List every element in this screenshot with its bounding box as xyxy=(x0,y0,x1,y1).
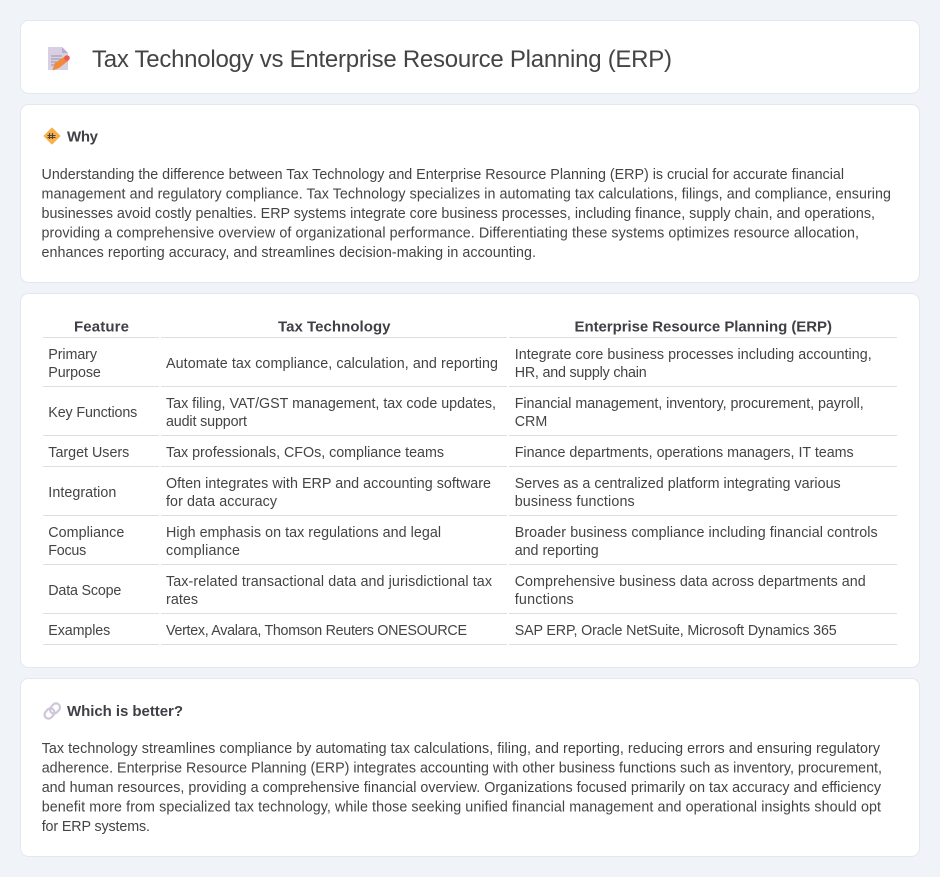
row: compliance focus: compliance xyxy=(166,543,240,559)
row: key functions xyxy=(48,396,864,430)
row: data scope: Comprehensive business data across departments and xyxy=(515,574,866,590)
row: target users: Tax professionals, CFOs, compliance teams xyxy=(166,445,444,461)
table header row: Feature xyxy=(74,318,129,336)
row: compliance focus: High emphasis on tax regulations and legal xyxy=(166,525,441,541)
text block: which paragraph xyxy=(42,741,882,835)
row: target users: Finance departments, operations managers, IT teams xyxy=(515,445,854,461)
text block: which paragraph: adherence. Enterprise Resource Planning (ERP) integrates accounting with other business functions such as inventory, procurement, xyxy=(42,760,882,776)
row: examples: Examples xyxy=(48,623,110,639)
row: primary purpose: HR, and supply chain xyxy=(515,365,647,381)
row: primary purpose: Primary xyxy=(48,347,98,363)
row: data scope xyxy=(48,574,866,608)
text block: why paragraph: enhances reporting accuracy, and streamlines decision-making in accounting. xyxy=(42,245,536,261)
heading: which is better: Which is better? xyxy=(67,703,183,720)
row: data scope: Data Scope xyxy=(48,583,121,599)
row: integration: Integration xyxy=(48,485,116,501)
row: primary purpose: Integrate core business processes including accounting, xyxy=(515,347,872,363)
panel: title card xyxy=(20,20,920,94)
icon: warning diamond xyxy=(44,128,60,144)
row: key functions: audit support xyxy=(166,414,247,430)
row: primary purpose xyxy=(48,347,872,381)
text block: why paragraph: businesses avoid costly penalties. ERP systems integrate core business processes, including finance, supply chain, and operations, xyxy=(42,206,875,222)
row: key functions: Key Functions xyxy=(48,405,137,421)
row: integration: for data accuracy xyxy=(166,494,278,510)
table header row: Tax Technology xyxy=(278,318,391,336)
panel: why xyxy=(20,104,920,282)
row: target users xyxy=(48,445,854,461)
row: primary purpose: Automate tax compliance, calculation, and reporting xyxy=(166,356,498,372)
row: integration xyxy=(48,476,841,510)
text block: why paragraph: management and regulatory compliance. Tax Technology specializes in automating tax calculations, filings, and compliance, ensuring xyxy=(42,186,891,202)
table header row: Enterprise Resource Planning (ERP) xyxy=(574,318,832,336)
row: integration: Serves as a centralized platform integrating various xyxy=(515,476,841,492)
text block: why paragraph: providing a comprehensive overview of organizational performance. Differentiating these systems optimizes resource allocation, xyxy=(42,226,859,242)
panel: comparison table xyxy=(20,294,920,668)
row: examples: Vertex, Avalara, Thomson Reuters ONESOURCE xyxy=(166,623,467,639)
row: integration: business functions xyxy=(515,494,635,510)
text block: which paragraph: Tax technology streamlines compliance by automating tax calculations, filing, and reporting, reducing errors and ensuring regulatory xyxy=(42,741,881,757)
panel: which is better xyxy=(20,678,920,856)
title: Tax Technology vs Enterprise Resource Planning (ERP) xyxy=(92,46,672,73)
row: examples: SAP ERP, Oracle NetSuite, Microsoft Dynamics 365 xyxy=(515,623,837,639)
table header row xyxy=(74,318,832,336)
icon: link xyxy=(43,702,62,720)
row: compliance focus: and reporting xyxy=(515,543,599,559)
row: key functions: Tax filing, VAT/GST management, tax code updates, xyxy=(166,396,496,412)
icon: document with pencil xyxy=(48,47,70,70)
row: key functions: Financial management, inventory, procurement, payroll, xyxy=(515,396,864,412)
text block: which paragraph: benefit more from specialized tax technology, while those seeking unified financial management and operational insights should opt xyxy=(42,800,881,816)
row: compliance focus: Compliance xyxy=(48,525,124,541)
text block: which paragraph: for ERP systems. xyxy=(42,819,150,835)
text block: why paragraph xyxy=(42,167,891,261)
row: compliance focus: Broader business compliance including financial controls xyxy=(515,525,878,541)
row: integration: Often integrates with ERP and accounting software xyxy=(166,476,491,492)
row: target users: Target Users xyxy=(48,445,129,461)
row: data scope: Tax-related transactional data and jurisdictional tax xyxy=(166,574,492,590)
row: data scope: functions xyxy=(515,592,574,608)
text block: which paragraph: and human resources, providing a comprehensive financial overview. Organizations focused primarily on tax accuracy and efficiency xyxy=(42,780,882,796)
row: compliance focus xyxy=(48,525,878,559)
row: key functions: CRM xyxy=(515,414,547,430)
row: examples xyxy=(48,623,837,639)
row: compliance focus: Focus xyxy=(48,543,86,559)
heading: why: Why xyxy=(67,128,99,146)
text block: why paragraph: Understanding the difference between Tax Technology and Enterprise Resource Planning (ERP) is crucial for accurate financial xyxy=(42,167,844,183)
row: primary purpose: Purpose xyxy=(48,365,101,381)
row: data scope: rates xyxy=(166,592,198,608)
